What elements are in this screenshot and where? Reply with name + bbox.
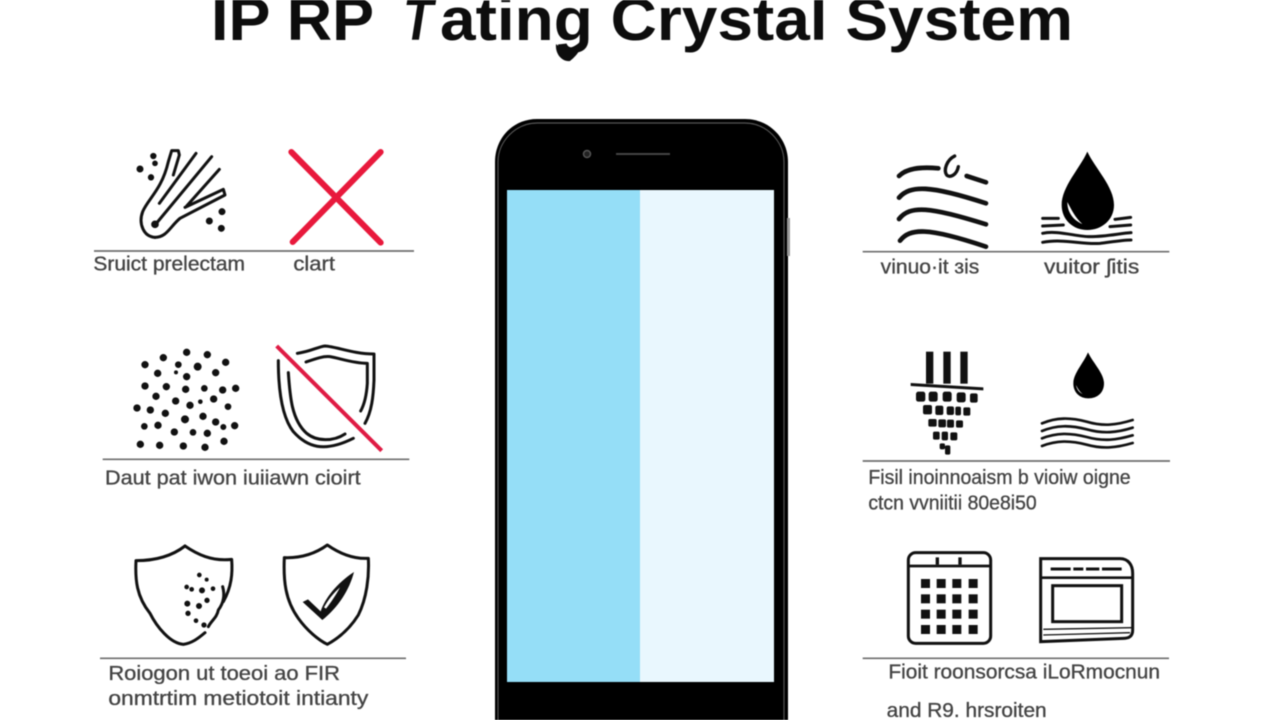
icon: oven: [1041, 559, 1133, 642]
icon: crossed shield: [277, 346, 382, 451]
icon: shower filter: [911, 352, 983, 455]
label: vuitor ʃitis: [1044, 256, 1139, 278]
icon: drop over waves: [1042, 352, 1133, 447]
label: Sruict prelectam: [93, 254, 245, 276]
label: vinuo·it ɜis: [881, 256, 979, 278]
icon: check shield: [284, 545, 369, 644]
title: [211, 0, 1073, 61]
icon: camera: [584, 150, 590, 158]
panel: phone: [495, 119, 790, 720]
screen: pale half: [640, 190, 774, 682]
speaker: [616, 153, 670, 155]
text block: [868, 467, 1131, 514]
icon: hand with particles: [137, 151, 225, 237]
icon: damaged shield: [136, 546, 232, 644]
text block: Roiogon ut toeoi ao FIR: [108, 663, 340, 685]
label: clart: [293, 254, 335, 276]
text block: Fioit roonsorcsa iLoRmocnun: [888, 661, 1160, 683]
text block: Fisil inoinnoaism b vioiw oigne: [868, 467, 1131, 489]
icon: large drop on water: [1043, 152, 1131, 244]
text block: ctcn vvniitii 80e8i50: [868, 492, 1037, 514]
text block: onmtrtim metiotoit intianty: [108, 688, 368, 710]
icon: red cross: [291, 152, 381, 243]
text block: [108, 663, 368, 710]
panel: shower and drop: [863, 352, 1170, 514]
text block: [887, 661, 1160, 720]
icon: calendar: [908, 553, 991, 643]
icon: dust dots: [134, 349, 239, 451]
panel: calendar and oven: [863, 553, 1169, 720]
screen: blue half: [507, 190, 640, 682]
panel: shields: [100, 545, 406, 710]
panel: strict protection: [93, 151, 414, 276]
panel: water jets: [863, 152, 1169, 278]
icon: wind waves: [899, 156, 986, 247]
label: Daut pat iwon iuiiawn cioirt: [105, 467, 361, 489]
panel: dust particles: [103, 346, 409, 489]
